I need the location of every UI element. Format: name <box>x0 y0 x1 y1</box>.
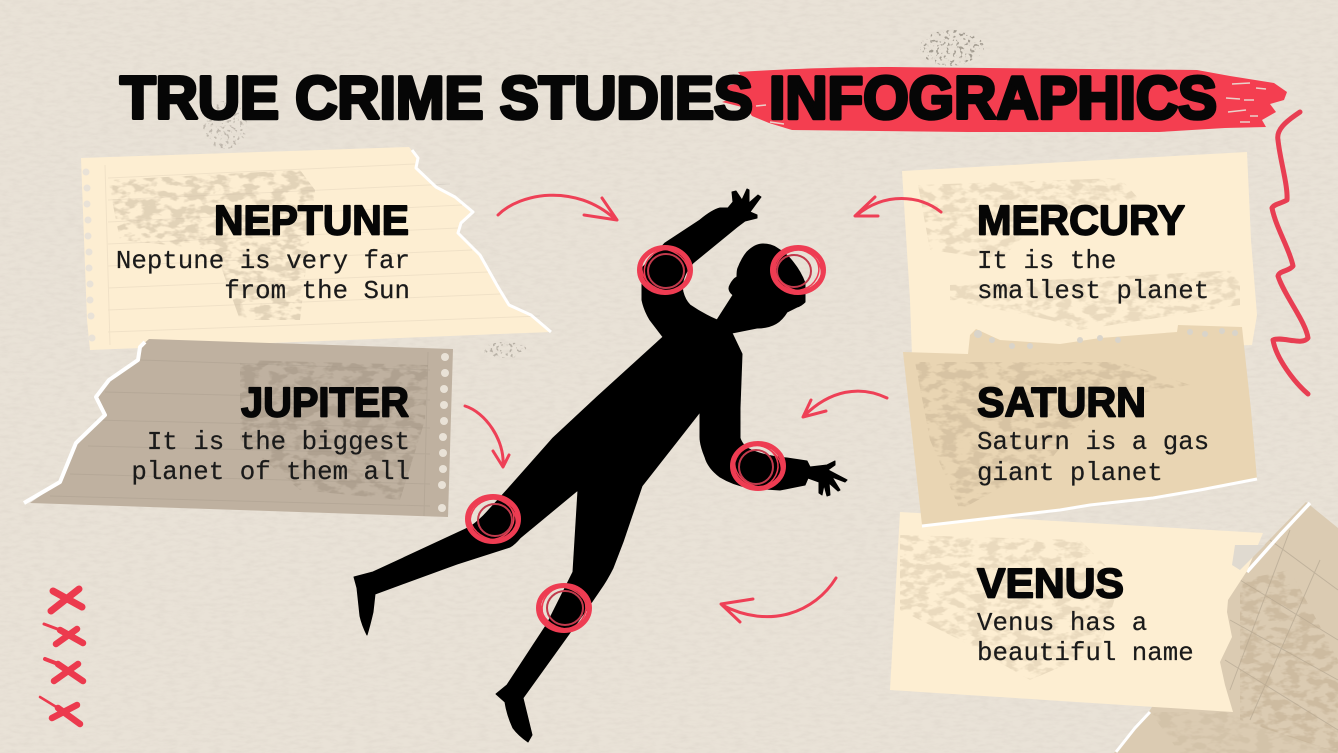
heading: MERCURY <box>977 196 1185 244</box>
description: from the Sun <box>224 277 410 306</box>
description: Venus has a <box>977 609 1147 638</box>
paper sheet <box>902 152 1257 360</box>
description <box>116 247 410 306</box>
description: Saturn is a gas <box>977 428 1209 457</box>
arrow: neptune to elbow <box>498 195 617 220</box>
heading: VENUS <box>977 560 1124 606</box>
torn brown paper in the corner <box>1114 502 1338 753</box>
paper sheet <box>30 339 453 517</box>
description: giant planet <box>977 459 1163 488</box>
red scribble rings on joints <box>463 242 828 636</box>
description <box>977 428 1209 488</box>
red x marks <box>40 589 83 724</box>
red squiggle line <box>1272 112 1308 394</box>
description <box>977 247 1209 306</box>
description: It is the <box>977 247 1116 276</box>
description: beautiful name <box>977 639 1194 668</box>
arrow: mercury to head <box>855 197 941 216</box>
red brush stroke behind title <box>716 67 1287 132</box>
description: smallest planet <box>977 277 1209 306</box>
ring: elbow lower <box>728 438 788 494</box>
panel: neptune note <box>81 147 551 350</box>
description <box>131 428 410 487</box>
panel: venus note <box>890 512 1265 712</box>
ring: head <box>768 242 828 298</box>
panel: mercury note <box>902 152 1257 360</box>
paper sheet <box>890 512 1263 712</box>
panel: saturn note <box>903 325 1257 526</box>
ring: elbow upper <box>635 242 695 298</box>
ring: knee right <box>534 580 594 636</box>
arrow: venus to knee <box>721 578 836 622</box>
description: planet of them all <box>131 458 410 487</box>
heading: JUPITER <box>241 378 409 426</box>
arrow: jupiter to knee <box>465 406 509 467</box>
heading: SATURN <box>977 378 1146 426</box>
description: It is the biggest <box>147 428 410 457</box>
panel: jupiter note <box>24 339 453 517</box>
human silhouette <box>354 189 847 742</box>
ring: knee left <box>463 491 523 547</box>
arrow: saturn to elbow <box>803 391 887 417</box>
paper sheet <box>81 147 551 350</box>
description: Neptune is very far <box>116 247 410 276</box>
heading: NEPTUNE <box>214 196 409 244</box>
description <box>977 609 1194 668</box>
paper sheet <box>903 325 1257 525</box>
title: TRUE CRIME STUDIES INFOGRAPHICS <box>120 64 1217 132</box>
